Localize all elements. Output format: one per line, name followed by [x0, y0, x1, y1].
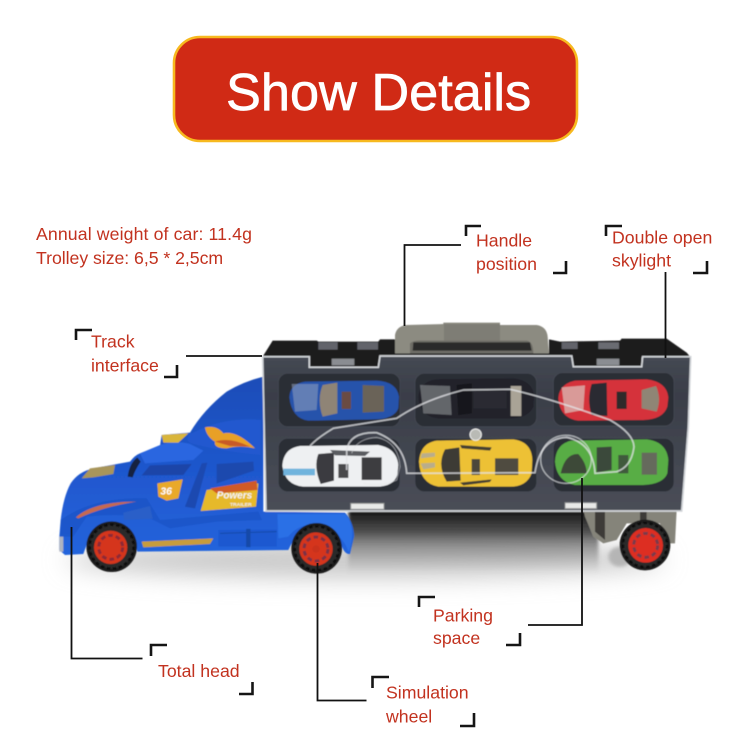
callout: simulation wheel: Simulation — [386, 682, 469, 702]
callout: track interface: interface — [91, 356, 159, 376]
parking slots — [278, 373, 674, 492]
flame decals — [205, 427, 255, 448]
handle — [395, 323, 549, 353]
black lid — [263, 339, 691, 367]
blue car — [289, 381, 399, 421]
truck cab — [59, 377, 354, 574]
callout: parking space: Parking — [433, 606, 493, 626]
bottom tabs — [351, 503, 384, 509]
sticker trailer — [201, 483, 258, 511]
red car — [558, 379, 668, 421]
callout: double open skylight: skylight — [612, 250, 671, 270]
callout: track interface: Track — [91, 332, 135, 352]
callout: track interface — [76, 330, 262, 377]
truck cab: Powers — [217, 490, 253, 501]
trailer undercarriage — [348, 510, 677, 573]
callout: total head — [72, 527, 252, 694]
callout: simulation wheel: wheel — [385, 706, 432, 726]
green car — [555, 439, 668, 485]
callout: total head: Total head — [158, 661, 240, 681]
toy truck — [59, 323, 691, 574]
callout: parking space: space — [433, 628, 480, 648]
rear cab wheel — [291, 523, 342, 574]
storage case — [263, 323, 691, 570]
clear panel — [263, 356, 691, 511]
sticker 36 — [157, 479, 183, 501]
trailer rear wheel — [620, 520, 670, 570]
specification text: Trolley size: 6,5 * 2,5cm — [36, 248, 223, 268]
front wheel — [86, 521, 137, 572]
truck cab: TRAILER — [230, 502, 252, 508]
callout: handle position — [404, 226, 566, 326]
embossed car outline — [310, 389, 634, 473]
callout: handle position: Handle — [476, 230, 532, 250]
specification text: Annual weight of car: 11.4g — [36, 224, 252, 244]
callout: double open skylight — [606, 226, 712, 358]
callout: double open skylight: Double open — [612, 228, 712, 248]
callout: handle position: position — [476, 254, 537, 274]
heading button: Show Details — [226, 64, 531, 122]
panel button — [470, 429, 481, 440]
truck cab: 36 — [160, 487, 172, 498]
callout: parking space — [419, 478, 582, 648]
white car — [282, 445, 398, 487]
callout: simulation wheel — [318, 563, 474, 726]
yellow car — [419, 439, 532, 487]
heading button — [174, 37, 577, 141]
black car — [418, 378, 534, 418]
specification text — [36, 224, 252, 268]
floor shadow — [65, 542, 665, 578]
